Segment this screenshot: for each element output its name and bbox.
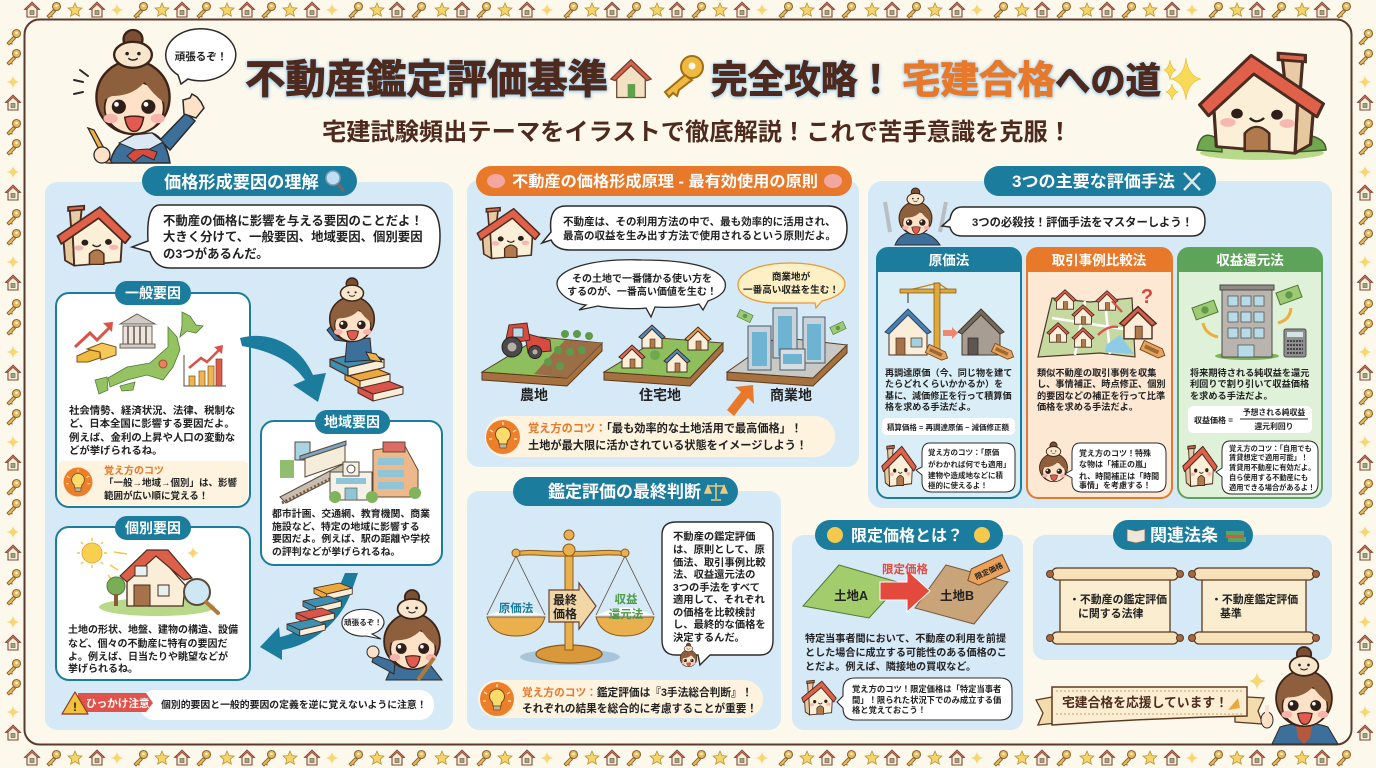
card: individual factors (56, 516, 250, 680)
tip: memory aid (478, 680, 763, 718)
formula: income method (1188, 406, 1312, 433)
scroll: appraisal standards: 基準 (1220, 606, 1242, 620)
label: regional factors (315, 410, 390, 434)
illustration: farmland (482, 323, 602, 403)
tip: memory aid: 覚え方のコツ：「最も効率的な土地活用で最高価格」！ (528, 423, 802, 435)
speech bubble: final judgment: の価格を比較検討 (673, 606, 755, 619)
character: house mascot (58, 206, 130, 266)
text: general factors: 社会情勢、経済状況、法律、税制な (69, 406, 235, 417)
text: comparison method: 価格を求める手法だよ。 (1037, 401, 1138, 412)
heading: limited price: 限定価格とは？ (851, 526, 963, 545)
character: pointing girl (1248, 647, 1338, 744)
speech bubble: cheer: 頑張るぞ！ (344, 618, 382, 627)
character: cheering girl (342, 590, 442, 680)
scroll: appraisal act (1046, 568, 1184, 644)
speech bubble: definition: 大きく分けて、一般要因、地域要因、個別要因 (163, 229, 423, 244)
panel: final judgment (467, 477, 781, 730)
speech bubble: comparison tip: な物は「補正の嵐」 (1079, 459, 1151, 469)
heading: final judgment (513, 477, 738, 506)
speech bubble: commercial (738, 263, 845, 308)
text: individual factors: よ。例えば、日当たりや眺望などが (68, 650, 228, 663)
label: general factors (115, 281, 191, 305)
speech bubble: best use (557, 260, 725, 317)
speech bubble: principle: 不動産は、その利用方法の中で、最も効率的に活用され、 (563, 216, 836, 228)
text: comparison method: し、事情補正、時点修正、個別 (1037, 378, 1166, 389)
character: waving student (74, 30, 204, 163)
banner: supporting success (1036, 687, 1264, 725)
arrow: general to regional (240, 336, 326, 402)
panel: related laws (1033, 520, 1332, 660)
label: farmland: 農地 (520, 387, 548, 403)
speech bubble: income tip: 適用できる場合があるよ！ (1229, 483, 1315, 492)
card: general factors (56, 281, 250, 507)
formula: income method: 収益価格 = (1194, 415, 1233, 425)
label: general factors: 一般要因 (125, 285, 181, 301)
heading: price factors: 価格形成要因の理解 (164, 172, 319, 192)
character: small girl (680, 643, 697, 667)
label: commercial: 商業地 (770, 387, 812, 403)
speech bubble: best use: するのが、一番高い価値を生む！ (567, 285, 717, 298)
illustration: crane and houses (885, 283, 1016, 362)
icon: gold key (665, 56, 703, 97)
speech bubble: cost tip: がわかれば何でも適用」 (928, 459, 1010, 469)
speech bubble: comparison tip: れ、時間補正は「時間 (1079, 471, 1159, 481)
text: comparison method: 的要因などの補正を行って比準 (1037, 390, 1165, 401)
formula: income method: 予想される純収益 (1243, 407, 1305, 417)
illustration: balance scale (487, 530, 654, 665)
label: regional factors: 地域要因 (324, 414, 380, 430)
heading: highest and best use: 不動産の価格形成原理 - 最有効使用の原則 (512, 172, 818, 190)
label: land B: 土地B (940, 588, 974, 603)
speech bubble: income tip: 自ら使用する不動産にも (1229, 473, 1308, 482)
scroll: appraisal standards: ・不動産鑑定評価 (1211, 594, 1298, 606)
text: cost method: 格を求める手法だよ。 (885, 401, 976, 412)
card: comparison method: 取引事例比較法 (1052, 252, 1147, 268)
warning callout: 個別的要因と一般的要因の定義を逆に覚えないように注意！ (161, 698, 427, 711)
speech bubble: final judgment: 不動産の鑑定評価 (673, 532, 755, 543)
heading: related laws (1113, 520, 1253, 550)
speech bubble: limited price tip: 覚え方のコツ！限定価格は「特定当事者 (852, 684, 1001, 694)
heading: highest and best use (476, 166, 852, 196)
tip: memory aid: 範囲が広い順に覚える！ (104, 490, 208, 502)
text: general factors: ど、日本全国に影響する要因だよ。 (69, 417, 235, 430)
card: regional factors (261, 410, 442, 565)
text: income method: 将来期待される純収益を還元 (1190, 368, 1309, 378)
speech bubble: principle (542, 206, 847, 250)
title (245, 56, 1201, 102)
speech bubble: limited price tip: 間」！限られた状況下でのみ成立する価 (852, 695, 1001, 705)
heading: final judgment: 鑑定評価の最終判断 (548, 482, 701, 502)
speech bubble: best use: その土地で一番儲かる使い方を (572, 274, 712, 285)
character: small girl (1040, 442, 1067, 482)
character: house mascot (802, 680, 836, 715)
label: land A: 土地A (834, 588, 868, 603)
character: big house (1197, 53, 1326, 160)
illustration: economy and Japan map (75, 312, 226, 394)
heading: three methods: 3つの主要な評価手法 (1012, 171, 1176, 191)
scroll: appraisal act: に関する法律 (1078, 606, 1143, 620)
tip: memory aid: それぞれの結果を総合的に考慮することが重要！ (522, 702, 757, 715)
speech bubble: header (166, 29, 236, 84)
text: cost method: 再調達原価（今、同じ物を建て (885, 368, 1012, 378)
speech bubble: limited price tip (837, 678, 1012, 720)
text: individual factors: 土地の形状、地盤、建物の構造、設備 (68, 625, 238, 636)
tag: limited price (964, 555, 1010, 589)
formula: cost method (882, 418, 1015, 435)
text: income method: 利回りで割り引いて収益価格 (1190, 378, 1310, 389)
speech bubble: header: 頑張るぞ！ (175, 51, 227, 63)
speech bubble: income tip (1216, 441, 1318, 494)
heading: price factors (142, 166, 357, 196)
text: regional factors: 施設など、特定の地域に影響する (272, 520, 420, 533)
speech bubble: final judgment: 価法、取引事例比較 (673, 556, 766, 569)
speech bubble: commercial: 一番高い収益を生む！ (743, 284, 839, 296)
card: income method: 収益還元法 (1216, 252, 1284, 268)
speech bubble: definition (132, 205, 440, 268)
character: house mascot (477, 208, 540, 259)
illustration: building with money (1192, 285, 1306, 360)
text: limited price: とだよ。例えば、隣接地の買収など。 (805, 660, 976, 673)
card: comparison method (1027, 248, 1172, 498)
tip: memory aid: 土地が最大限に活かされている状態をイメージしよう！ (528, 438, 807, 452)
illustration: house with sun and magnifier (77, 538, 218, 616)
heading: three methods (984, 166, 1216, 196)
text: individual factors: 挙げられるね。 (68, 662, 138, 675)
speech bubble: master methods (942, 207, 1205, 236)
sign: final price (549, 583, 596, 629)
speech bubble: final judgment (662, 522, 773, 665)
speech bubble: income tip: 賃貸用不動産に有効だよ。 (1229, 463, 1315, 472)
text: regional factors: の評判などが挙げられるね。 (272, 545, 400, 558)
illustration: land A and B (803, 555, 1010, 624)
tip: memory aid: 覚え方のコツ (104, 464, 164, 477)
speech bubble: comparison tip: 覚え方のコツ！特殊 (1079, 449, 1151, 458)
card: cost method: 原価法 (929, 252, 970, 268)
panel: three appraisal methods (868, 166, 1332, 508)
speech bubble: income tip: 覚え方のコツ：「自用でも (1229, 444, 1312, 453)
speech bubble: final judgment: 法、収益還元法の (673, 568, 755, 581)
speech bubble: income tip: 賃貸想定で適用可能」！ (1229, 453, 1308, 462)
speech bubble: commercial: 商業地が (772, 272, 810, 283)
text: general factors: どが挙げられるね。 (69, 444, 163, 457)
illustration: station, school, shops (280, 441, 421, 503)
label: income method: 還元法 (609, 607, 644, 621)
speech bubble: comparison tip (1065, 443, 1166, 492)
icon: sparkles (1164, 58, 1201, 100)
speech bubble: final judgment: 決定するんだ。 (673, 631, 745, 644)
character: girl on books (327, 278, 403, 401)
label: individual factors: 個別要因 (125, 520, 181, 536)
speech bubble: definition: 不動産の価格に影響を与える要因のことだよ！ (163, 214, 423, 228)
text: general factors: 例えば、金利の上昇や人口の変動な (69, 431, 235, 444)
illustration: residential (604, 325, 723, 403)
illustration: map of transactions (1038, 286, 1167, 360)
title: 完全攻略！ (711, 60, 894, 102)
speech bubble: final judgment: 適用して、それぞれ (673, 593, 766, 606)
formula: income method: 還元利回り (1255, 421, 1293, 431)
arrow: to commercial (727, 385, 754, 416)
speech bubble: comparison tip: 事情」を考慮する！ (1079, 480, 1151, 490)
speech bubble: final judgment: 3つの手法をすべて (673, 581, 760, 594)
text: cost method: たらどれくらいかかるか）を (885, 378, 1003, 389)
speech bubble: principle: 最高の収益を生み出す方法で使用されるという原則だよ。 (563, 229, 836, 242)
speech bubble: limited price tip: 格と覚えておこう！ (852, 705, 926, 715)
text: limited price: とした場合に成立する可能性のある価格のこ (805, 646, 1007, 659)
tip: memory aid (58, 461, 248, 505)
arrow with books: regional to individual (260, 573, 358, 660)
sign: final price: 最終 (553, 593, 577, 607)
tip: memory aid (485, 416, 835, 457)
speech bubble: cost tip: 覚え方のコツ：「原価 (928, 448, 999, 457)
speech bubble: cost tip (916, 443, 1015, 492)
text: comparison method: 類似不動産の取引事例を収集 (1037, 368, 1156, 378)
character: girl with swords (885, 188, 946, 245)
sign: final price: 価格 (553, 606, 577, 621)
speech bubble: cost tip: 建物や造成地などに積 (928, 470, 1003, 480)
formula: cost method: 積算価格 = 再調達原価 − 減価修正額 (887, 422, 1010, 432)
subtitle: 宅建試験頻出テーマをイラストで徹底解説！これで苦手意識を克服！ (322, 119, 1072, 146)
speech bubble: final judgment: し、最終的な価格を (673, 618, 766, 631)
title: 宅建合格 (902, 60, 1056, 102)
speech bubble: final judgment: は、原則として、原 (673, 543, 765, 556)
speech bubble: master methods: 3つの必殺技！評価手法をマスターしよう！ (972, 215, 1193, 229)
tip: memory aid: 覚え方のコツ：鑑定評価は『3手法総合判断』！ (522, 687, 752, 699)
heading: limited price (815, 520, 1003, 550)
text: regional factors: 要因だよ。例えば、駅の距離や学校 (272, 532, 430, 545)
text: regional factors: 都市計画、交通網、教育機関、商業 (272, 509, 430, 520)
scroll: appraisal standards (1188, 568, 1320, 644)
title: 不動産鑑定評価基準 (245, 58, 608, 102)
text: individual factors: など、個々の不動産に特有の要因だ (68, 637, 228, 650)
tip: memory aid: 「一般→地域→個別」は、影響 (104, 478, 237, 489)
banner: supporting success: 宅建合格を応援しています！ (1062, 695, 1228, 710)
text: income method: を求める手法だよ。 (1190, 390, 1273, 401)
tag: limited price: 限定価格 (973, 560, 1005, 582)
text: limited price: 特定当事者間において、不動産の利用を前提 (805, 634, 1006, 645)
label: residential: 住宅地 (639, 387, 681, 403)
text: cost method: 基に、減価修正を行って積算価 (885, 390, 1012, 401)
panel: highest and best use (467, 166, 859, 467)
label: limited price: 限定価格 (882, 562, 928, 576)
card: income method (1178, 248, 1322, 498)
speech bubble: definition: の3つがあるんだ。 (163, 246, 269, 261)
illustration: commercial (727, 308, 847, 403)
title: への道 (1055, 60, 1161, 101)
character: house mascot (1183, 445, 1217, 486)
warning callout: ひっかけ注意 (86, 697, 150, 710)
panel: limited price (792, 520, 1023, 730)
label: cost method: 原価法 (499, 601, 534, 615)
heading: related laws: 関連法条 (1150, 525, 1218, 545)
warning callout: ! (73, 700, 77, 714)
character: house mascot (882, 445, 916, 486)
card: cost method (877, 248, 1021, 498)
warning callout (62, 690, 434, 720)
label: income method: 収益 (614, 594, 638, 606)
illustration: map of transactions: ? (1141, 286, 1153, 308)
icon: house emoji (611, 60, 651, 97)
speech bubble: cost tip: 極的に使えるよ！ (928, 480, 988, 490)
scroll: appraisal act: ・不動産の鑑定評価 (1069, 594, 1167, 606)
label: individual factors (115, 516, 191, 540)
panel: price formation factors (45, 166, 453, 730)
